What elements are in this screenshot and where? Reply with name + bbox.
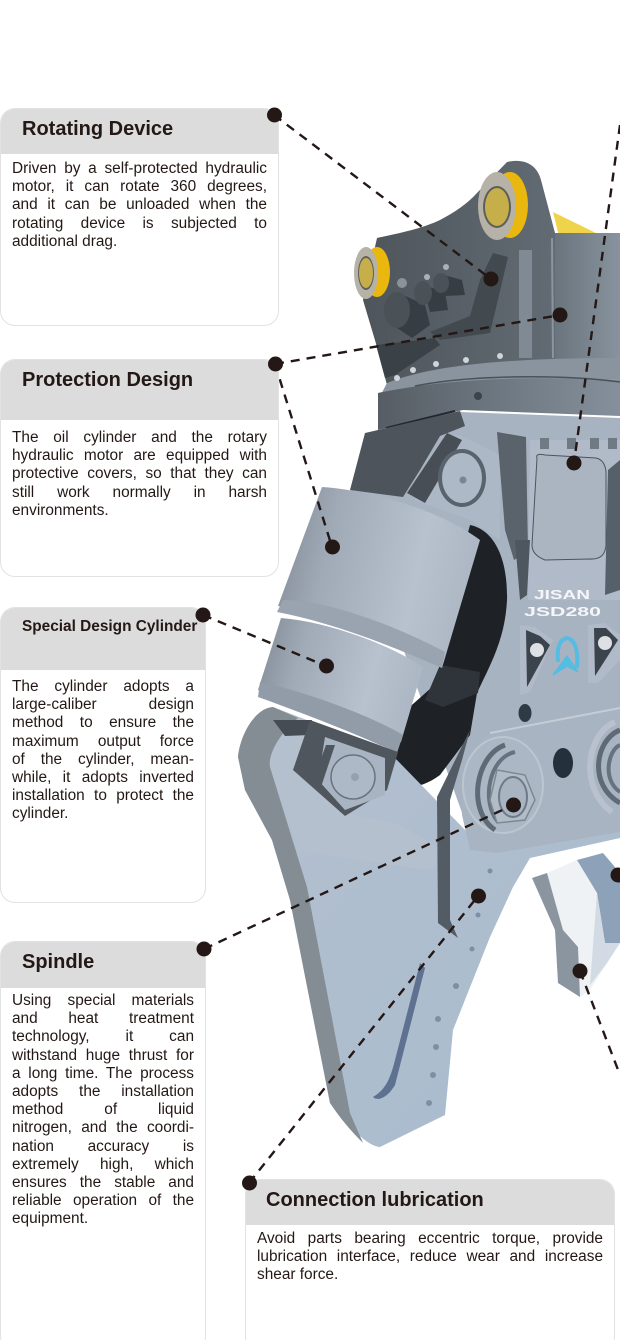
text: spindle: nitrogen, and the coordi- (12, 1119, 194, 1136)
text: special design cylinder: of the cylinder, mean- (12, 751, 194, 768)
text: spindle: adopts the installation (12, 1083, 194, 1100)
text: special design cylinder: maximum output force (12, 733, 194, 750)
rotator ring (378, 353, 620, 430)
text: spindle: nation accuracy is (12, 1138, 194, 1154)
text: rotating device (12, 160, 267, 250)
text: special design cylinder: The cylinder adopts a (12, 678, 194, 695)
text: special design cylinder: method to ensure the (12, 714, 194, 731)
text: spindle: reliable operation of the (12, 1192, 194, 1209)
panel: rotating device (0, 108, 279, 326)
text: special design cylinder: while, it adopts inverted (12, 769, 194, 786)
product name: JSD280 (524, 604, 601, 619)
left pin (354, 247, 390, 299)
heading: connection lubrication: Connection lubrication (266, 1189, 484, 1211)
text: protection design: protective covers, so that they can (12, 465, 267, 482)
text: spindle (12, 992, 194, 1227)
text: spindle: a long time. The process (12, 1065, 194, 1082)
text: spindle: method of liquid (12, 1101, 194, 1118)
text: connection lubrication: lubrication interface, reduce wear and increase (257, 1248, 603, 1265)
product name (524, 587, 601, 619)
main body (345, 411, 620, 835)
jaw (238, 707, 620, 1147)
text: protection design: The oil cylinder and the rotary (12, 429, 267, 446)
text: rotating device: and it can be unloaded when the (12, 196, 267, 213)
dark cylinder cavity (387, 525, 507, 787)
text: rotating device: Driven by a self-protected hydraulic (12, 160, 267, 177)
cylinder (258, 487, 480, 753)
text: special design cylinder: cylinder. (12, 805, 68, 822)
text: connection lubrication: Avoid parts bearing eccentric torque, provide (257, 1230, 603, 1247)
text: protection design: environments. (12, 502, 109, 519)
hydraulic fittings (376, 253, 508, 378)
panel: connection lubrication (245, 1179, 615, 1340)
text: connection lubrication: shear force. (257, 1266, 338, 1283)
text: spindle: withstand huge thrust for (12, 1047, 194, 1064)
text: spindle: and heat treatment (12, 1010, 194, 1027)
lugs (520, 623, 620, 695)
logo (553, 638, 578, 675)
side plate and spindle bolts (462, 708, 620, 853)
text: protection design: hydraulic motor are equipped with (12, 447, 267, 464)
text: connection lubrication (257, 1230, 603, 1283)
mount and pins (354, 161, 620, 385)
text: special design cylinder (12, 678, 194, 822)
text: spindle: equipment. (12, 1210, 88, 1227)
text: special design cylinder: large-caliber design (12, 696, 194, 713)
product name: JISAN (534, 587, 590, 602)
second jaw (532, 853, 620, 997)
dark plate strip (437, 730, 470, 938)
heading: rotating device: Rotating Device (22, 118, 173, 140)
heading: special design cylinder: Special Design Cylinder (22, 618, 197, 635)
callout lines (203, 115, 620, 1183)
jaw clevis bolt (293, 720, 398, 816)
text: spindle: Using special materials (12, 992, 194, 1009)
heading: protection design: Protection Design (22, 369, 193, 391)
jaw groove (373, 963, 425, 1099)
text: protection design: still work normally in harsh (12, 484, 267, 501)
text: spindle: extremely high, which (12, 1156, 194, 1173)
right pin (478, 172, 528, 240)
text: protection design (12, 429, 267, 519)
text: spindle: ensures the stable and (12, 1174, 194, 1191)
heading: spindle: Spindle (22, 951, 94, 973)
panel: spindle (0, 941, 206, 1340)
panel: protection design (0, 359, 279, 577)
panel: special design cylinder (0, 607, 206, 903)
text: rotating device: additional drag. (12, 233, 117, 250)
text: special design cylinder: installation to protect the (12, 787, 194, 804)
text: spindle: technology, it can (12, 1028, 194, 1045)
text: rotating device: rotating device is subjected to (12, 215, 267, 232)
text: rotating device: motor, it can rotate 360 degrees, (12, 178, 267, 195)
